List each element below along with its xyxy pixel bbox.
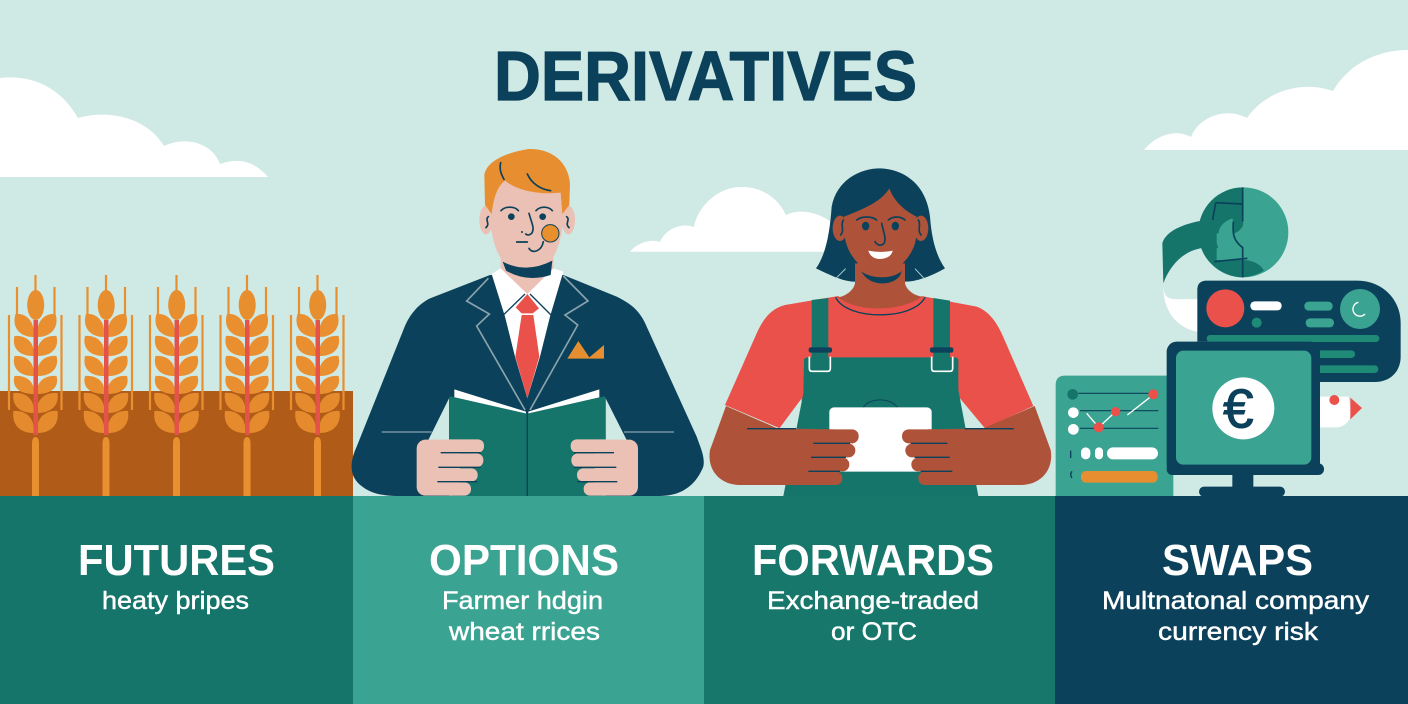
panel: farmer woman with tablet	[709, 168, 1051, 496]
panel: man in suit with book	[352, 149, 704, 496]
dark dashboard panel	[1197, 281, 1401, 382]
hair	[816, 168, 945, 282]
face	[844, 188, 917, 273]
suit body	[352, 275, 704, 496]
overalls	[783, 298, 978, 496]
right hand	[571, 439, 638, 496]
heading: futures: FUTURES	[78, 536, 275, 585]
hair	[484, 149, 570, 214]
white tablet	[829, 407, 932, 472]
pocket square	[567, 341, 604, 359]
panel: futures illustration	[0, 275, 353, 496]
red shirt	[725, 296, 1033, 428]
sleeve lines	[382, 430, 674, 434]
right arm and hand	[902, 406, 1051, 485]
panel: futures label	[0, 496, 353, 704]
wheat stalk 3	[150, 275, 202, 496]
wheat stalk 5	[291, 275, 344, 496]
cloud: top right	[1144, 50, 1408, 150]
buckles	[809, 347, 953, 371]
wheat stalk 2	[80, 275, 132, 496]
wheat stalk 4	[220, 275, 273, 496]
book cover	[449, 397, 606, 496]
title: DERIVATIVES	[494, 37, 917, 115]
neck	[501, 253, 553, 295]
text: swaps description: currency risk	[1158, 618, 1319, 646]
smile	[868, 251, 893, 259]
left hand	[417, 439, 484, 496]
heading: swaps: SWAPS	[1162, 536, 1313, 585]
collar line	[836, 297, 925, 315]
text: options description: Farmer hdgin	[442, 587, 603, 615]
heading: forwards: FORWARDS	[752, 536, 994, 585]
text: swaps description: Multnatonal company	[1102, 587, 1370, 615]
green chart card	[1056, 376, 1173, 496]
arm gaps	[779, 398, 977, 428]
facial features	[486, 163, 569, 251]
text: forwards description	[767, 587, 979, 646]
monitor with euro symbol	[1167, 342, 1324, 497]
neck shadow	[861, 271, 902, 283]
hair highlights	[836, 269, 924, 278]
book spine	[525, 413, 529, 496]
open book	[449, 389, 606, 496]
ears	[479, 206, 493, 234]
wheat stalk 1	[9, 275, 62, 496]
text: options description	[442, 587, 603, 646]
ears	[833, 216, 847, 241]
red tie	[515, 294, 539, 398]
text: options description: wheat rrices	[448, 618, 600, 646]
arm gaps	[428, 398, 627, 440]
left arm and hand	[709, 406, 859, 485]
orange monocle	[542, 225, 559, 242]
panel: swaps currency illustration	[1056, 187, 1401, 497]
overall bib	[783, 357, 978, 496]
panel: options label	[353, 496, 704, 704]
panel: swaps label	[1055, 496, 1408, 704]
neck	[838, 263, 922, 308]
lapels	[467, 276, 588, 410]
text: swaps description	[1102, 587, 1370, 646]
monitor with euro symbol: €	[1223, 378, 1254, 440]
cloud: top left	[0, 77, 268, 177]
facial features	[841, 217, 921, 245]
heading: options: OPTIONS	[429, 536, 619, 585]
text: forwards description: Exchange-traded	[767, 587, 979, 615]
panel: forwards label	[704, 496, 1055, 704]
text: forwards description: or OTC	[831, 618, 917, 646]
tablet handle	[863, 400, 897, 407]
globe icon	[1162, 187, 1288, 283]
collar lines	[503, 294, 551, 315]
face	[490, 180, 563, 261]
cloud: middle	[630, 187, 835, 252]
text: futures description: heaty þripes	[102, 587, 249, 615]
neck shadow	[503, 261, 552, 278]
overall straps	[812, 298, 950, 360]
white swoosh	[1163, 287, 1198, 332]
white arrow shape	[1318, 395, 1362, 427]
shirt	[492, 268, 563, 398]
soil field	[0, 391, 353, 496]
book pages	[454, 389, 599, 414]
